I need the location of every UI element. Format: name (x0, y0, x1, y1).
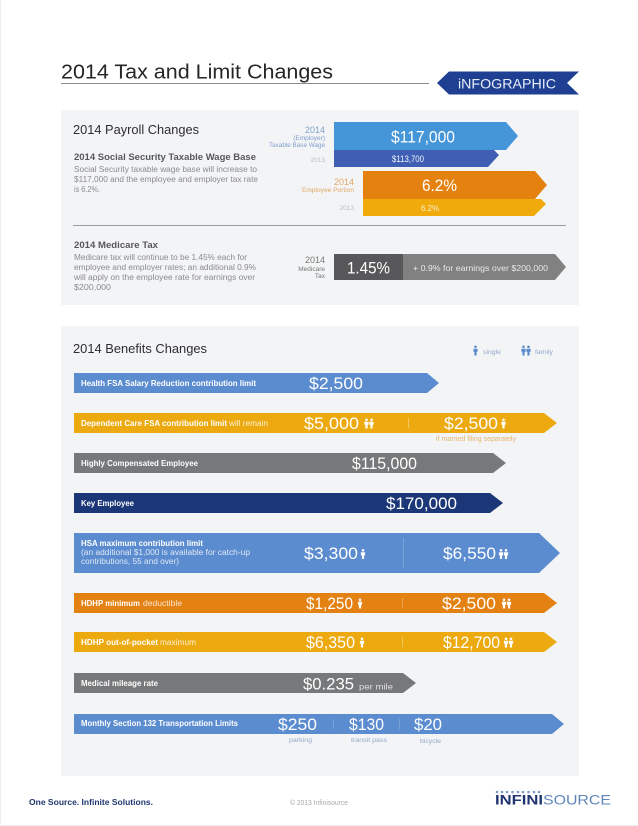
text block: medicare tax (73, 240, 256, 292)
row: hsa maximum: $3,300 (304, 544, 358, 563)
chart: taxable wage base: Taxable Base Wage (269, 142, 325, 149)
row: dependent care fsa: Dependent Care FSA contribution limit (81, 419, 227, 428)
text block: social security: 2014 Social Security Taxable Wage Base (74, 152, 256, 163)
chart: employee portion: 6.2% (422, 176, 457, 195)
row: hsa maximum (74, 533, 560, 573)
footer tagline: One Source. Infinite Solutions. (29, 797, 153, 807)
chart: taxable wage base (269, 122, 518, 167)
row: monthly section 132 transportation limits: Monthly Section 132 Transportation Limits (81, 719, 239, 728)
chart: employee portion: Employee Portion (302, 187, 354, 194)
row: medical mileage rate: $0.235 (303, 674, 354, 694)
row: medical mileage rate: per mile (359, 682, 393, 692)
row: monthly section 132 transportation limits: transit pass (351, 737, 388, 744)
footer copyright: © 2013 Infinisource (290, 799, 348, 807)
row: dependent care fsa: will remain (228, 419, 268, 428)
heading: payroll changes: 2014 Payroll Changes (73, 123, 199, 137)
chart: medicare: + 0.9% for earnings over $200,000 (413, 263, 548, 273)
banner: infographic (437, 72, 579, 94)
row: health fsa: Health FSA Salary Reduction contribution limit (81, 379, 256, 388)
chart: medicare: 2014 (305, 255, 325, 265)
chart: taxable wage base: 2013 (311, 157, 325, 164)
row: hdhp out-of-pocket maximum: $6,350 (306, 633, 355, 652)
logo: infinisource: INFINI (495, 792, 543, 808)
chart: medicare: Tax (315, 273, 326, 280)
row: monthly section 132 transportation limits: parking (289, 737, 312, 744)
row: key employee (74, 493, 503, 513)
row: dependent care fsa: $2,500 (444, 414, 498, 433)
chart: employee portion: 2013 (340, 205, 354, 212)
row: monthly section 132 transportation limits: bicycle (420, 738, 441, 745)
row: hdhp minimum deductible: $2,500 (442, 594, 496, 613)
row: highly compensated employee (74, 453, 506, 473)
text block: medicare tax: will apply on the employee rate for earnings over (73, 273, 255, 282)
title: 2014 Tax and Limit Changes (61, 62, 333, 84)
legend (473, 346, 554, 356)
row: hsa maximum: (an additional $1,000 is available for catch-up (81, 548, 251, 557)
row: hdhp out-of-pocket maximum: maximum (160, 638, 196, 647)
row: monthly section 132 transportation limits: $130 (349, 715, 384, 734)
row: highly compensated employee: $115,000 (352, 454, 417, 473)
chart: taxable wage base: (Employer) (293, 135, 325, 142)
text block: medicare tax: Medicare tax will continue to be 1.45% each for (74, 253, 247, 262)
row: highly compensated employee: Highly Compensated Employee (81, 459, 199, 468)
row: hdhp out-of-pocket maximum: $12,700 (443, 633, 500, 652)
chart: employee portion: 6.2% (421, 203, 439, 213)
chart: medicare: Medicare (298, 266, 325, 273)
row: monthly section 132 transportation limits (74, 714, 564, 745)
row: hdhp minimum deductible: deductible (143, 599, 183, 608)
row: health fsa: $2,500 (309, 374, 363, 393)
chart: taxable wage base: $117,000 (391, 128, 455, 146)
row: hsa maximum: $6,550 (443, 544, 496, 563)
chart: taxable wage base: $113,700 (392, 154, 424, 164)
row: hdhp minimum deductible: HDHP minimum (81, 599, 140, 608)
row: medical mileage rate (74, 673, 416, 694)
row: key employee: Key Employee (81, 499, 135, 508)
row: hdhp out-of-pocket maximum (74, 632, 557, 652)
chart: employee portion: 2014 (334, 177, 354, 187)
row: hsa maximum: HSA maximum contribution limit (81, 539, 203, 548)
row: health fsa (74, 373, 439, 393)
panel: benefits changes (61, 326, 579, 776)
panel: payroll changes (61, 110, 579, 305)
legend: single (483, 349, 501, 356)
row: hdhp minimum deductible (74, 593, 557, 613)
text block: medicare tax: 2014 Medicare Tax (74, 240, 159, 251)
logo: infinisource (495, 791, 611, 808)
row: monthly section 132 transportation limits: $250 (278, 715, 317, 734)
chart: medicare: 1.45% (347, 258, 390, 278)
row: hsa maximum: contributions, 55 and over) (81, 557, 179, 566)
heading: benefits changes: 2014 Benefits Changes (73, 342, 207, 356)
chart: medicare (298, 254, 566, 280)
text block: medicare tax: employee and employer rates; an additional 0.9% (74, 263, 256, 272)
text block: social security: is 6.2%. (74, 185, 100, 194)
row: hdhp out-of-pocket maximum: HDHP out-of-pocket (81, 638, 158, 647)
row: dependent care fsa: $5,000 (304, 414, 359, 433)
row: medical mileage rate: Medical mileage rate (81, 679, 159, 688)
row: key employee: $170,000 (386, 494, 457, 513)
banner: infographic: iNFOGRAPHIC (458, 76, 556, 92)
text block: social security (74, 152, 259, 194)
row: monthly section 132 transportation limits: $20 (414, 715, 442, 734)
row: dependent care fsa: if married filing separately (436, 436, 516, 443)
text block: medicare tax: $200,000 (74, 283, 112, 292)
row: dependent care fsa (74, 413, 557, 443)
text block: social security: Social Security taxable wage base will increase to (74, 165, 258, 174)
row: hdhp minimum deductible: $1,250 (306, 594, 353, 613)
text block: social security: $117,000 and the employee and employer tax rate (74, 175, 259, 184)
chart: employee portion (302, 171, 547, 216)
chart: taxable wage base: 2014 (305, 125, 325, 135)
legend: family (535, 349, 554, 356)
logo: infinisource: SOURCE (543, 792, 611, 808)
